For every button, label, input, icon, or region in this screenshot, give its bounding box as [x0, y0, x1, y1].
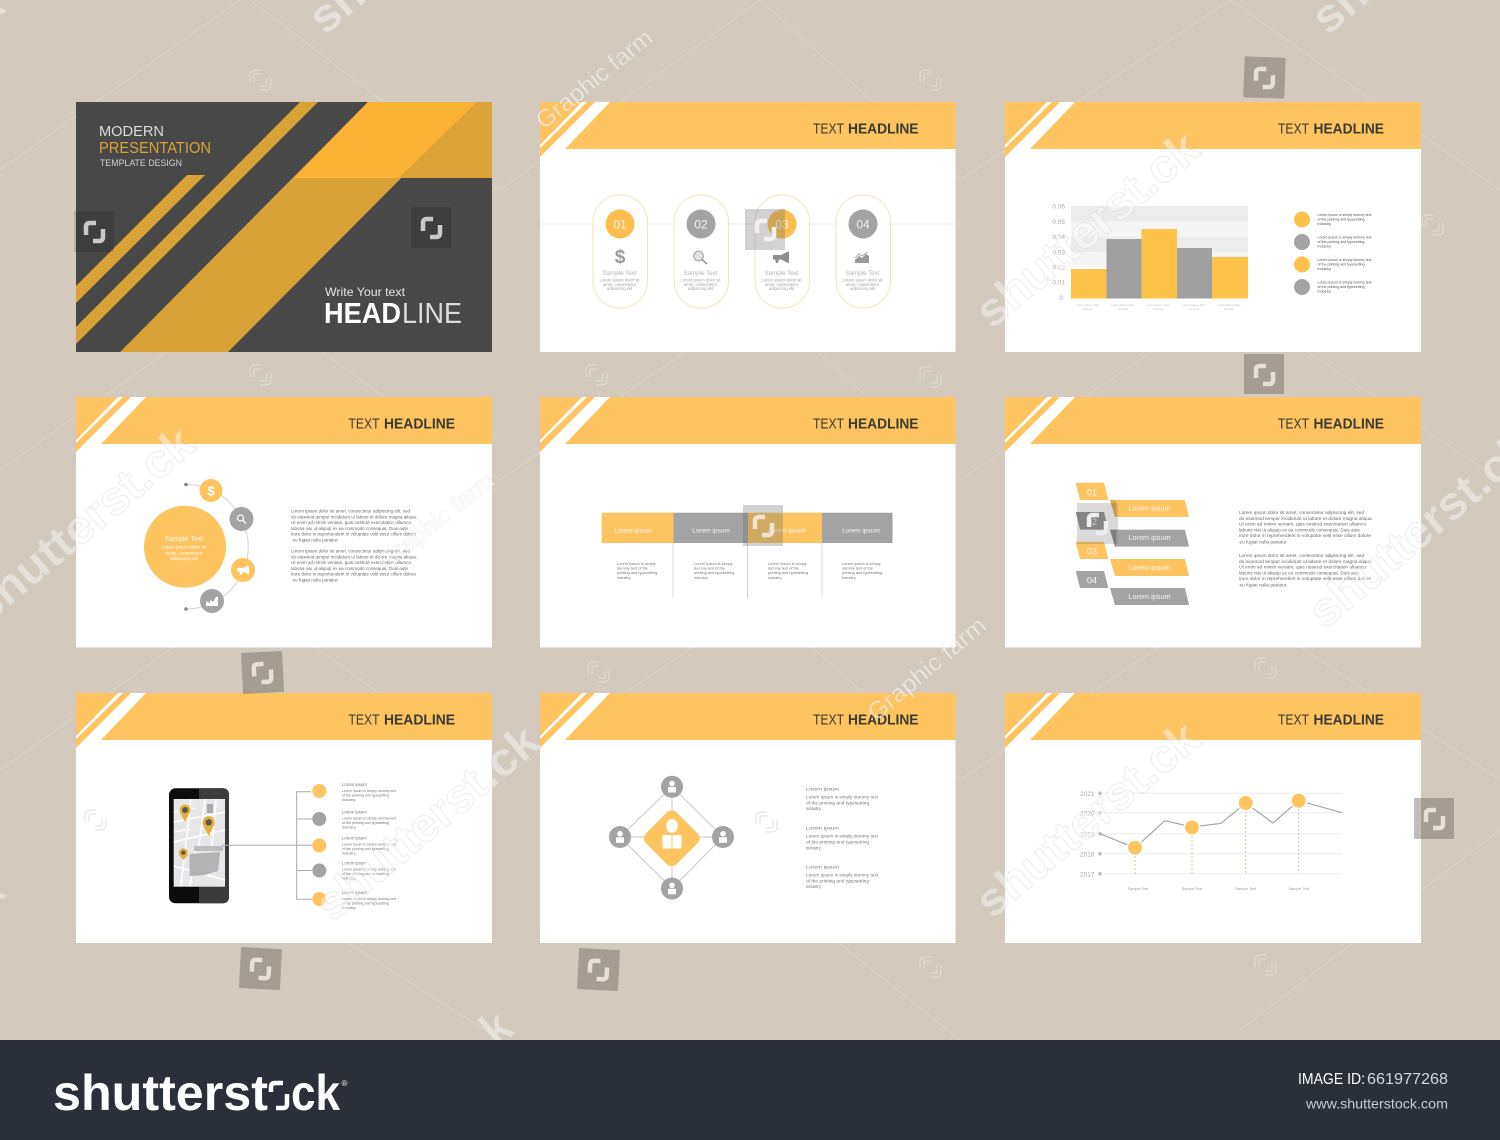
- cover title: PRESENTATION: [99, 140, 211, 157]
- list text: [806, 786, 879, 889]
- list text: industry.: [342, 905, 356, 910]
- list text: Lorem Ipsum is simply dummy text: [806, 834, 879, 838]
- watermark: Graphic farm labels: Graphic farm: [863, 612, 992, 727]
- heading: [348, 416, 455, 432]
- bar chart: sit amet: [1153, 307, 1163, 311]
- table header bar: [602, 513, 892, 543]
- footer logo: ®: [342, 1079, 348, 1088]
- chart legend: of the printing and typesetting: [1318, 218, 1364, 222]
- image id text: www.shutterstock.com: [1305, 1096, 1448, 1112]
- chart legend: Lorem Ipsum is simply dummy text: [1318, 280, 1372, 284]
- chart legend: of the printing and typesetting: [1318, 285, 1364, 289]
- chart legend: [1294, 212, 1372, 295]
- chart legend: Lorem Ipsum is simply dummy text: [1318, 213, 1372, 217]
- image id text: IMAGE ID:: [1298, 1071, 1365, 1088]
- step 01: Lorem ipsum dolor sit: [599, 278, 640, 282]
- column text: Lorem Ipsum is simply: [694, 561, 733, 566]
- body text: irure dolor in reprehenderit in voluptate velit esse cillum dolore: [1239, 533, 1371, 538]
- step 02: 02: [694, 218, 708, 232]
- image id text: [1298, 1071, 1448, 1112]
- line chart: Sample Text: [1235, 887, 1257, 891]
- step 01: 01: [613, 218, 627, 232]
- body text: [291, 508, 417, 582]
- bar chart: 0.06: [1052, 204, 1065, 210]
- heading: TEXT: [813, 122, 844, 138]
- body text: Lorem ipsum dolor sit amet, consectetur adipiscing elit, sed: [291, 548, 410, 554]
- ribbon 04: 04: [1087, 576, 1097, 586]
- body text: eu fugiat nulla pariatur.: [292, 538, 338, 542]
- column text: industry.: [694, 575, 708, 580]
- heading: TEXT: [813, 712, 844, 728]
- body text: irure dolor in reprehenderit in voluptate velit esse cillum dolore: [291, 532, 416, 537]
- heading: TEXT: [348, 712, 380, 728]
- bar chart: 0.04: [1052, 234, 1065, 241]
- list text: Lorem ipsum: [806, 826, 839, 832]
- step 02: Sample Text: [684, 270, 718, 277]
- body text: do eiusmod tempor incididunt ut labore et dolore magna aliqua.: [1239, 559, 1373, 564]
- list text: of the printing and typesetting: [806, 800, 870, 806]
- watermark: Graphic farm labels: Graphic farm: [373, 467, 500, 575]
- body text: irure dolor in reprehenderit in voluptate velit esse cillum dolore: [1239, 576, 1371, 581]
- column text: Lorem Ipsum is simply: [768, 561, 807, 566]
- bar chart: sit amet: [1118, 307, 1128, 311]
- watermark: Graphic farm labels: Graphic farm: [531, 24, 658, 135]
- list text: Lorem Ipsum is simply dummy text: [342, 816, 397, 820]
- heading: HEADLINE: [848, 122, 919, 138]
- ribbon 01: Lorem ipsum: [1128, 504, 1171, 512]
- ribbon 04: Lorem ipsum: [1128, 592, 1171, 601]
- step 02: [674, 195, 728, 308]
- step 04: 04: [856, 218, 870, 232]
- bar chart: Lorem ipsum dolor: [1217, 303, 1241, 307]
- body text: laboris nisi ut aliquip ex ea commodo consequat. Duis aute: [291, 566, 408, 571]
- heading: TEXT: [1278, 712, 1309, 728]
- orbit diagram: [144, 479, 255, 613]
- body text: Lorem ipsum dolor sit amet, consectetur adipiscing elit, sed: [291, 508, 410, 514]
- step 04: adipiscing elit: [850, 286, 876, 291]
- bar chart: Lorem ipsum dolor: [1111, 303, 1135, 307]
- list text: of the printing and typesetting: [342, 820, 389, 825]
- panel: circle diagram slide: [76, 397, 492, 648]
- bar chart: Lorem ipsum dolor: [1076, 303, 1100, 307]
- footer logo: shutterst: [53, 1065, 268, 1121]
- panel: phone map slide: [76, 693, 492, 943]
- cover headline: [324, 285, 462, 330]
- bar chart: sit amet: [1189, 307, 1199, 311]
- body text: eu fugiat nulla pariatur.: [1240, 582, 1288, 588]
- column text: printing and typesetting: [768, 570, 808, 575]
- list text: industry.: [806, 846, 822, 850]
- chart legend: of the printing and typesetting: [1318, 262, 1364, 266]
- bar chart: 0.02: [1052, 264, 1065, 272]
- column text: industry.: [842, 575, 856, 580]
- list text: Lorem Ipsum is simply dummy text: [342, 896, 397, 901]
- chart legend: industry.: [1318, 290, 1332, 294]
- line chart: Sample Text: [1289, 887, 1310, 891]
- step 04: amet, consectetur: [846, 282, 880, 287]
- column text: printing and typesetting: [617, 570, 657, 575]
- watermark: shutterstock diagonal wordmarks: k: [469, 999, 522, 1056]
- ribbon 02: Lorem ipsum: [1128, 533, 1171, 542]
- list text: Lorem Ipsum is simply dummy text: [342, 842, 397, 846]
- cover headline: Write Your text: [325, 285, 406, 299]
- column text: printing and typesetting: [842, 570, 882, 575]
- list text: of the printing and typesetting: [342, 871, 389, 876]
- bar chart: sit amet: [1224, 307, 1234, 311]
- column text: Lorem Ipsum is simply: [842, 561, 881, 566]
- body text: Lorem ipsum dolor sit amet, consectetur adipiscing elit, sed: [1239, 510, 1364, 515]
- icon: smartphone with map: [169, 788, 229, 903]
- heading: HEADLINE: [1314, 416, 1384, 432]
- heading: HEADLINE: [1314, 122, 1384, 138]
- chart legend: industry.: [1318, 267, 1332, 271]
- list text: Lorem ipsum: [806, 786, 839, 792]
- orbit diagram: Sample Text: [165, 536, 203, 543]
- body text: eu fugiat nulla pariatur.: [292, 578, 338, 582]
- list text: Lorem Ipsum is simply dummy text: [806, 872, 879, 878]
- bar chart: sit amet: [1083, 307, 1093, 311]
- column text: [617, 561, 882, 580]
- watermark: Graphic farm labels: [373, 24, 992, 727]
- body text: eu fugiat nulla pariatur.: [1240, 540, 1288, 544]
- ribbon 02: 02: [1087, 517, 1097, 527]
- connector lines: [222, 792, 312, 899]
- column text: printing and typesetting: [694, 570, 734, 575]
- heading: HEADLINE: [384, 416, 455, 432]
- panel: line chart slide: [1005, 693, 1421, 943]
- list text: of the printing and typesetting: [342, 846, 389, 851]
- bar chart: 0.03: [1052, 250, 1065, 256]
- line chart: Sample Text: [1128, 887, 1149, 891]
- column text: industry.: [768, 575, 782, 580]
- heading: HEADLINE: [848, 712, 919, 728]
- list text: of the printing and typesetting: [806, 878, 870, 884]
- step 01: adipiscing elit: [607, 286, 633, 291]
- orbit diagram: Lorem ipsum dolor sit: [162, 544, 207, 550]
- body text: laboris nisi ut aliquip ex ea commodo consequat. Duis aute: [1239, 570, 1360, 575]
- watermark: shutterstock diagonal wordmarks: shutterst.ck: [964, 710, 1210, 928]
- list text: industry.: [342, 824, 356, 830]
- step 02: amet, consectetur: [684, 282, 718, 287]
- step 03: adipiscing elit: [769, 286, 795, 291]
- line chart: 2020: [1080, 810, 1095, 818]
- bar chart: 0.05: [1052, 219, 1065, 226]
- panel: cover slide: [76, 102, 492, 352]
- list text: Lorem ipsum: [342, 890, 367, 895]
- body text: Ut enim ad minim veniam, quis nostrud exercitation ullamco: [1239, 565, 1366, 570]
- body text: do eiusmod tempor incididunt ut labore et dolore magna aliqua.: [291, 514, 417, 519]
- line chart: 2018: [1080, 852, 1095, 858]
- watermark: shutterstock diagonal wordmarks: shutterst.ck: [964, 120, 1210, 338]
- body text: Ut enim ad minim veniam, quis nostrud exercitation ullamco: [1239, 522, 1366, 527]
- line chart: Sample Text: [1182, 887, 1203, 891]
- heading: [1278, 122, 1384, 138]
- list text: Lorem Ipsum is simply dummy text: [342, 788, 397, 793]
- cover title: [99, 123, 211, 169]
- step 04: Lorem ipsum dolor sit: [842, 278, 883, 282]
- column text: dummy text of the: [694, 566, 725, 570]
- panel: table columns slide: [540, 397, 956, 648]
- column text: dummy text of the: [617, 566, 648, 570]
- cover title: MODERN: [99, 123, 164, 140]
- step 01: Sample Text: [603, 270, 637, 277]
- table header bar: Lorem ipsum: [842, 528, 880, 534]
- list text: of the printing and typesetting: [342, 792, 389, 798]
- list text: Lorem Ipsum is simply dummy text: [342, 866, 397, 872]
- step 03: [755, 195, 810, 308]
- chart legend: industry.: [1318, 222, 1332, 226]
- panel: network diamond slide: [540, 693, 956, 943]
- panel: process pills slide: [540, 102, 956, 352]
- orbit diagram: $: [207, 484, 215, 498]
- step 04: Sample Text: [846, 270, 880, 277]
- chart legend: industry.: [1318, 244, 1332, 248]
- heading: HEADLINE: [1314, 712, 1384, 728]
- list text: industry.: [342, 850, 356, 856]
- panel: bar chart slide: [1005, 102, 1421, 352]
- list text: industry.: [342, 797, 356, 802]
- ribbon 03: Lorem ipsum: [1128, 563, 1171, 572]
- step 01: amet, consectetur: [603, 282, 637, 287]
- heading: [813, 416, 919, 432]
- line chart: 2019: [1080, 832, 1095, 838]
- ribbon 01: [1076, 483, 1189, 517]
- footer logo: ck: [291, 1065, 340, 1121]
- step 02: adipiscing elit: [688, 286, 714, 291]
- list text: Lorem ipsum: [342, 860, 367, 866]
- step 03: Lorem ipsum dolor sit: [761, 278, 802, 282]
- body text: irure dolor in reprehenderit in voluptate velit esse cillum dolore: [291, 572, 416, 577]
- column text: Lorem Ipsum is simply: [617, 561, 656, 566]
- cover headline: HEAD: [324, 298, 401, 330]
- body text: laboris nisi ut aliquip ex ea commodo consequat. Duis aute: [1239, 527, 1360, 532]
- list text: Lorem ipsum: [342, 782, 367, 787]
- step 04: [836, 195, 890, 308]
- heading: [1278, 712, 1384, 728]
- body text: do eiusmod tempor incididunt ut labore et dolore magna aliqua.: [291, 554, 417, 559]
- watermark: shutterstock diagonal wordmarks: shutterst.ck: [304, 713, 550, 931]
- heading: TEXT: [813, 416, 844, 432]
- chart legend: Lorem Ipsum is simply dummy text: [1318, 258, 1372, 262]
- chart legend: of the printing and typesetting: [1318, 240, 1364, 244]
- step 03: 03: [775, 218, 789, 232]
- heading: [813, 712, 919, 728]
- body text: laboris nisi ut aliquip ex ea commodo consequat. Duis aute: [291, 526, 408, 531]
- footer bar: [0, 1040, 1500, 1140]
- bar chart: 0: [1059, 295, 1063, 302]
- orbit diagram: amet, consectetur: [165, 550, 203, 555]
- heading: TEXT: [348, 416, 380, 432]
- column text: industry.: [617, 575, 631, 580]
- line chart: 2021: [1080, 791, 1095, 798]
- table header bar: Lorem ipsum: [692, 528, 730, 534]
- ribbon 01: 01: [1087, 488, 1097, 498]
- heading: [813, 122, 919, 138]
- body text: Lorem ipsum dolor sit amet, consectetur adipiscing elit, sed: [1239, 553, 1364, 558]
- list text: Lorem ipsum: [342, 836, 367, 840]
- list text: Lorem ipsum: [806, 864, 839, 870]
- list text: Lorem ipsum: [342, 810, 367, 814]
- watermark: grey logo squares: [74, 56, 1454, 991]
- bar chart: Lorem ipsum dolor: [1182, 303, 1206, 307]
- cover headline: LINE: [402, 298, 462, 330]
- list text: Lorem Ipsum is simply dummy text: [806, 794, 879, 800]
- heading: HEADLINE: [848, 416, 919, 432]
- heading: [348, 712, 455, 728]
- list text: industry.: [342, 876, 356, 880]
- heading: TEXT: [1278, 122, 1309, 138]
- step 01: $: [615, 247, 626, 268]
- step 03: amet, consectetur: [765, 282, 799, 287]
- ribbon 04: [1076, 571, 1189, 605]
- step 03: Sample Text: [765, 270, 799, 277]
- bar chart: 0.01: [1052, 280, 1065, 286]
- image id text: 661977268: [1367, 1071, 1448, 1088]
- body text: [1239, 510, 1373, 588]
- list text: industry.: [806, 806, 822, 811]
- bar chart: [1052, 204, 1248, 311]
- list text: industry.: [806, 884, 822, 889]
- bar chart: Lorem ipsum dolor: [1146, 303, 1170, 307]
- column text: dummy text of the: [842, 566, 873, 570]
- body text: Ut enim ad minim veniam, quis nostrud exercitation ullamco: [291, 560, 411, 565]
- ribbon 03: [1076, 542, 1189, 576]
- table header bar: Lorem ipsum: [614, 528, 652, 534]
- line chart: 2017: [1080, 872, 1095, 878]
- column text: dummy text of the: [768, 566, 799, 570]
- step 02: Lorem ipsum dolor sit: [680, 278, 721, 282]
- list text: [342, 782, 397, 910]
- cover title: TEMPLATE DESIGN: [100, 158, 182, 169]
- list text: of the printing and typesetting: [806, 840, 870, 844]
- watermark: outline logos: [87, 72, 1441, 975]
- table header bar: Lorem ipsum: [768, 528, 806, 534]
- list text: of the printing and typesetting: [342, 900, 389, 906]
- step 01: [593, 195, 648, 308]
- chart legend: Lorem Ipsum is simply dummy text: [1318, 236, 1372, 240]
- heading: [1278, 416, 1384, 432]
- panel: ribbon list slide: [1005, 397, 1421, 648]
- timeline dots: [312, 784, 326, 906]
- heading: HEADLINE: [384, 712, 455, 728]
- orbit diagram: adipiscing elit: [170, 556, 199, 561]
- line chart: [1080, 791, 1342, 891]
- ribbon 03: 03: [1087, 546, 1097, 556]
- body text: Ut enim ad minim veniam, quis nostrud exercitation ullamco: [291, 520, 411, 525]
- heading: TEXT: [1278, 416, 1309, 432]
- ribbon 02: [1076, 512, 1189, 547]
- network diagram: [609, 776, 734, 900]
- body text: do eiusmod tempor incididunt ut labore et dolore magna aliqua.: [1239, 516, 1373, 521]
